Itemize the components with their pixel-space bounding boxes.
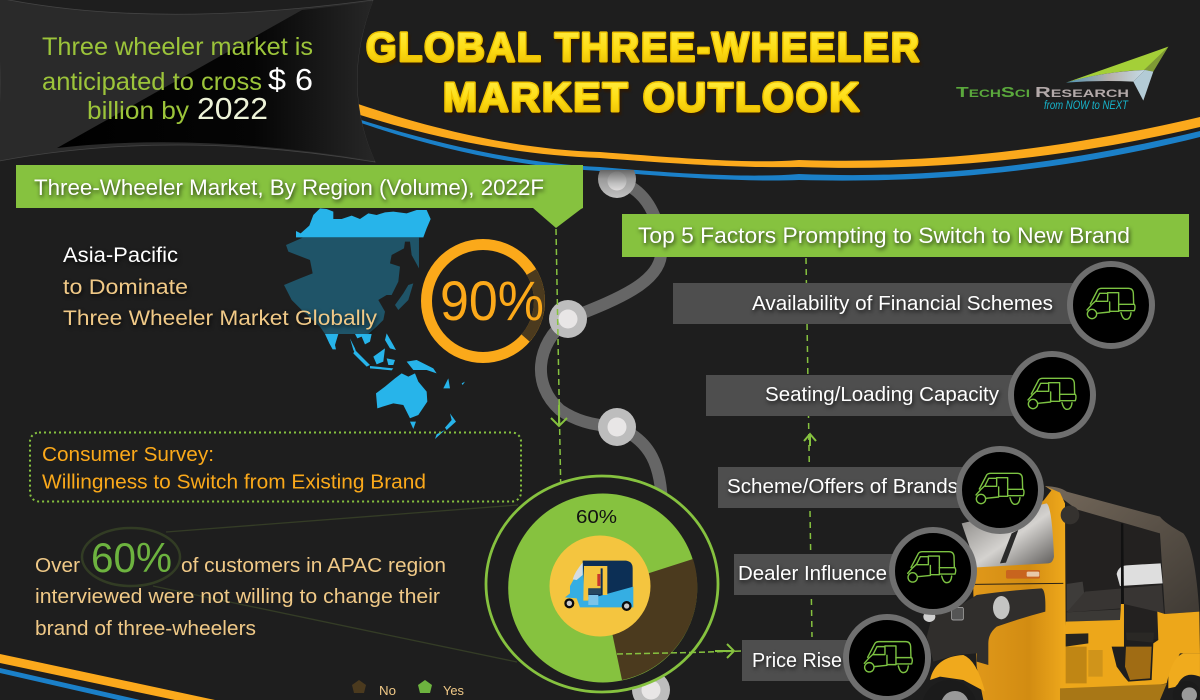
callout leader lines — [153, 505, 518, 662]
panel header: region — [16, 165, 583, 228]
title — [366, 24, 921, 120]
node: lower — [598, 408, 636, 446]
panel: consumer survey heading: Consumer Survey: — [42, 444, 214, 466]
banner text: billion by — [87, 97, 190, 125]
banner text: Three wheeler market is — [42, 33, 313, 61]
logo: TechSci Research: T ECH S CI — [956, 84, 1030, 101]
icon: rickshaw outline — [1087, 288, 1135, 319]
title: GLOBAL THREE-WHEELER — [366, 24, 921, 70]
text: Asia-Pacific callout: Asia-Pacific — [63, 244, 178, 267]
banner text: $ 6 — [268, 62, 313, 97]
icon: rickshaw outline — [1028, 378, 1076, 409]
text: survey finding: of customers in APAC region — [181, 555, 446, 577]
node: bottom — [632, 671, 670, 700]
arrow: region to survey — [551, 229, 567, 502]
image: yellow auto rickshaw — [922, 486, 1200, 700]
text: Asia-Pacific callout: to Dominate — [63, 276, 188, 299]
panel: consumer survey heading — [30, 432, 521, 502]
chart: willingness pie: 60% — [576, 506, 617, 527]
factor: dealer influence — [734, 530, 974, 612]
text: Asia-Pacific callout — [63, 244, 378, 330]
icon: rickshaw outline — [976, 473, 1024, 504]
factor: price rise — [742, 617, 928, 699]
text: survey finding: 60% — [91, 534, 172, 581]
icon: blue auto rickshaw — [564, 561, 633, 611]
legend: No — [379, 683, 396, 698]
panel header: factors — [622, 214, 1189, 257]
factor: seating and loading capacity — [706, 354, 1093, 436]
factor: scheme and offers of brands: Scheme/Offers of Brands — [727, 475, 958, 498]
text: survey finding: Over — [35, 555, 80, 577]
logo: TechSci Research — [956, 47, 1168, 112]
icon: rickshaw outline — [908, 552, 956, 583]
legend: Yes — [443, 683, 464, 698]
bottom-left swoosh — [0, 654, 215, 700]
banner text: 2022 — [197, 91, 268, 126]
factor: availability of financial schemes: Availability of Financial Schemes — [752, 292, 1053, 315]
banner text — [42, 33, 313, 126]
node: middle — [549, 300, 587, 338]
title: MARKET OUTLOOK — [443, 74, 861, 120]
factor: scheme and offers of brands — [718, 449, 1041, 531]
chart: 90% ring — [426, 244, 544, 358]
factor: dealer influence: Dealer Influence — [738, 562, 887, 585]
factor: price rise: Price Rise — [752, 649, 842, 672]
arrow: pie to factors — [690, 644, 742, 658]
panel header: region: Three-Wheeler Market, By Region (Volume), 2022F — [34, 175, 544, 200]
text: survey finding: brand of three-wheelers — [35, 618, 256, 640]
banner text: anticipated to cross — [42, 68, 262, 96]
factor: availability of financial schemes — [673, 264, 1152, 346]
logo: TechSci Research: from NOW to NEXT — [1044, 100, 1129, 112]
arrow: factors upward — [804, 258, 816, 637]
panel: consumer survey heading: Willingness to Switch from Existing Brand — [42, 472, 426, 494]
map: Asia-Pacific — [284, 208, 465, 439]
panel: market size banner — [0, 0, 375, 162]
text: survey finding — [35, 528, 446, 640]
top swoosh — [355, 103, 1200, 181]
text: Asia-Pacific callout: Three Wheeler Market Globally — [63, 307, 378, 330]
chart: willingness pie — [486, 476, 718, 692]
icon: rickshaw outline — [864, 642, 912, 673]
text: survey finding: interviewed were not willing to change their — [35, 586, 440, 608]
connector path — [541, 184, 662, 510]
logo: TechSci Research: R ESEARCH — [1035, 84, 1129, 101]
legend — [352, 680, 464, 698]
node: top — [598, 170, 636, 198]
chart: 90% ring: 90% — [440, 269, 544, 332]
panel header: factors: Top 5 Factors Prompting to Switch to New Brand — [638, 223, 1130, 248]
factor: seating and loading capacity: Seating/Loading Capacity — [765, 383, 1000, 406]
